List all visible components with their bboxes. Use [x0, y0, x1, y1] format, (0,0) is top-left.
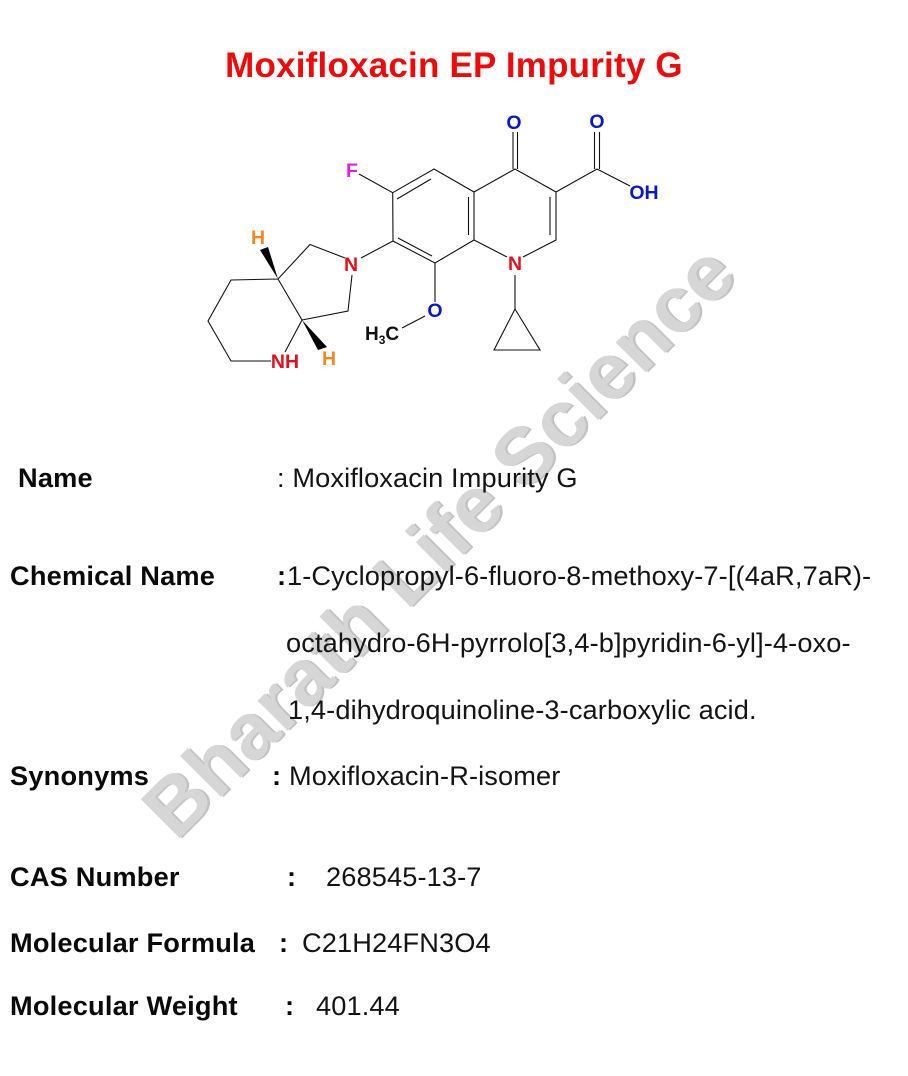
row: name: : Moxifloxacin Impurity G [277, 462, 578, 493]
row: chemical name [10, 560, 871, 725]
row: chemical name: : [277, 560, 286, 591]
atom labels [251, 111, 659, 373]
atom labels: O [589, 111, 605, 133]
row: chemical name: Chemical Name [10, 560, 215, 591]
row: name: Name [18, 462, 93, 493]
atom labels: OH [629, 182, 659, 204]
row: molecular formula [10, 927, 491, 958]
row: molecular formula: : [279, 927, 288, 958]
row: molecular weight: Molecular Weight [10, 990, 238, 1021]
atom labels: H [322, 348, 336, 370]
atom labels: H [365, 324, 379, 345]
atom labels: C [385, 324, 399, 345]
row: chemical name: octahydro-6H-pyrrolo[3,4-b]pyridin-6-yl]-4-oxo- [286, 627, 851, 658]
atom labels: N [344, 254, 358, 276]
title: Moxifloxacin EP Impurity G [225, 46, 683, 85]
row: molecular weight: 401.44 [316, 990, 400, 1021]
atom labels: O [427, 300, 443, 322]
row: molecular weight [10, 990, 400, 1021]
atom labels: NH [271, 351, 299, 373]
row: CAS number: : [287, 861, 296, 892]
chemical structure [208, 111, 659, 373]
row: molecular formula: Molecular Formula [10, 927, 256, 958]
bonds [208, 132, 630, 361]
row: chemical name: 1-Cyclopropyl-6-fluoro-8-methoxy-7-[(4aR,7aR)- [287, 560, 871, 591]
row: molecular weight: : [285, 990, 294, 1021]
row: CAS number [10, 861, 482, 892]
row: CAS number: CAS Number [10, 861, 180, 892]
row: molecular formula: C21H24FN3O4 [302, 927, 491, 958]
row: synonyms [10, 760, 560, 791]
stereo wedges [260, 247, 327, 350]
atom labels: F [346, 160, 358, 182]
row: synonyms: : [272, 760, 281, 791]
row: name [18, 462, 578, 493]
row: synonyms: Synonyms [10, 760, 149, 791]
atom labels: N [508, 253, 522, 275]
row: synonyms: Moxifloxacin-R-isomer [289, 760, 560, 791]
atom labels: 3 [379, 333, 386, 347]
row: chemical name: 1,4-dihydroquinoline-3-carboxylic acid. [288, 694, 757, 725]
row: CAS number: 268545-13-7 [326, 861, 482, 892]
watermark: Bharath Life Science [128, 227, 754, 854]
watermark: Bharath Life Science [125, 227, 752, 854]
atom labels: O [506, 112, 522, 134]
atom labels: H [251, 227, 265, 249]
